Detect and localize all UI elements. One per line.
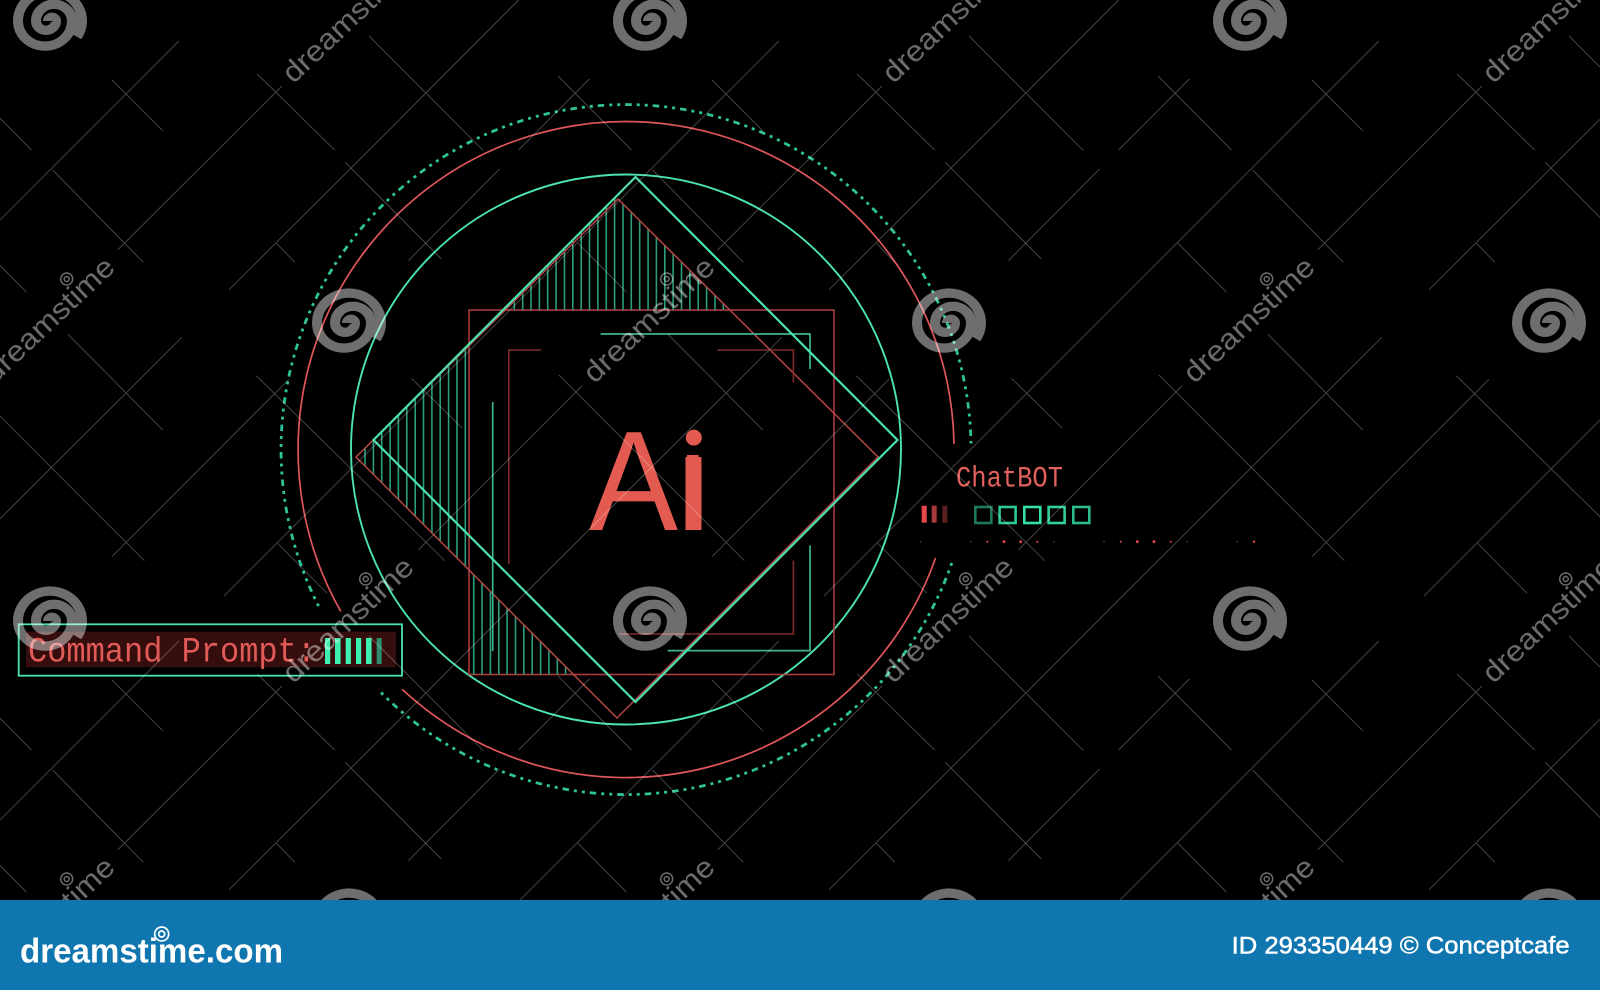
watermark diagonal texts: dreamstime [577,851,721,990]
watermark diagonal texts: dreamstime [876,551,1020,690]
chatbot teal squares [975,507,1089,523]
chatbot dot row [920,540,1255,543]
teal diamond [374,177,898,702]
command prompt box [19,624,402,676]
inner teal corner brackets [493,334,810,651]
watermark diagonal texts: dreamstime [577,251,721,390]
teal circle [351,174,901,724]
footer logo text: dreamstime.com [20,932,283,970]
watermark diagonal texts: dreamstime [1177,251,1321,390]
watermark diagonal texts: dreamstime [276,551,420,690]
image id and credit: ID 293350449 © Conceptcafe [1232,932,1570,959]
red square [469,310,834,674]
chatbot label: ChatBOT [956,462,1063,496]
chatbot red level bars [922,506,947,523]
red ring [298,122,954,778]
red diamond [356,199,878,718]
dotted teal outer ring [281,105,971,795]
hatching [365,190,723,680]
emblem: concentric circles, diamonds and square around Ai [281,105,971,795]
Ai label: Ai [589,402,708,561]
watermark diagonal texts: dreamstime [1177,851,1321,990]
inner red corner brackets [509,350,793,634]
watermark small logos [61,273,1572,885]
footer logo spiral [155,927,169,941]
progress bars [325,638,382,664]
footer bar [0,900,1600,990]
command prompt box: Command Prompt: [28,632,316,672]
